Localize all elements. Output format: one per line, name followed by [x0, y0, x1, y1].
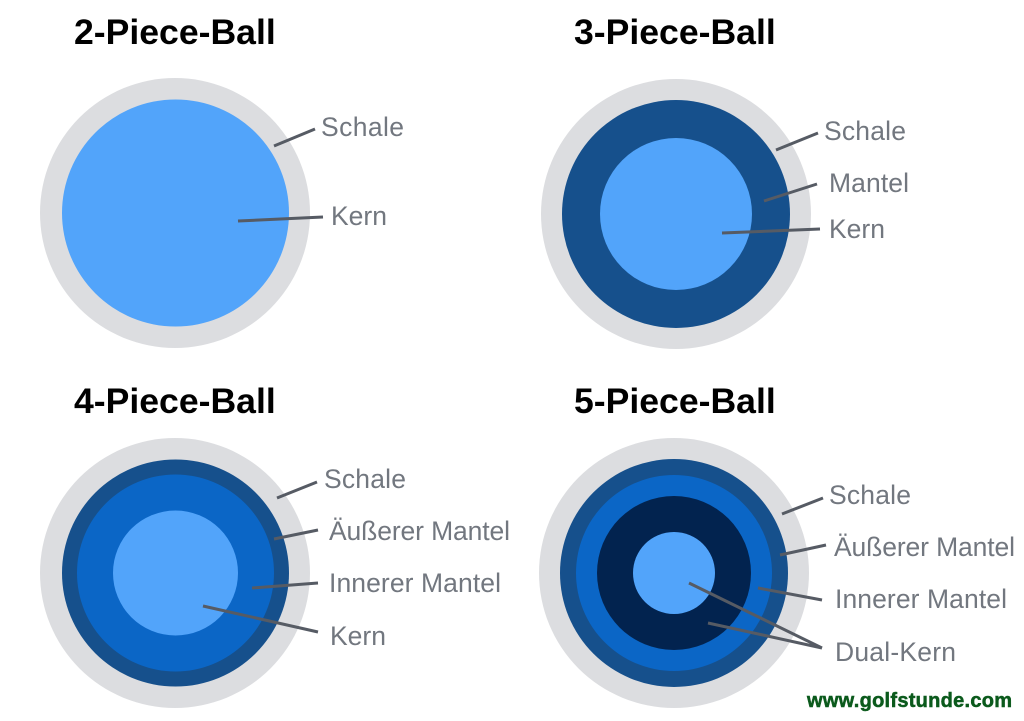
panel: 2-piece ball [40, 12, 404, 348]
website watermark: www.golfstunde.com [806, 690, 1012, 712]
callout: Schale [277, 464, 406, 498]
callout: Äußerer Mantel: Äußerer Mantel [834, 532, 1015, 562]
callout: Mantel [764, 168, 909, 201]
heading: 3-Piece-Ball: 3-Piece-Ball [574, 12, 776, 52]
panel: 3-piece ball [541, 12, 909, 349]
callout: Schale [782, 480, 911, 514]
callout: Kern [722, 214, 885, 244]
diagram: 5-piece ball cross-section [539, 438, 809, 708]
diagram: 3-piece ball cross-section [541, 79, 811, 349]
callout: Äußerer Mantel: Äußerer Mantel [329, 516, 510, 546]
callout: Schale: Schale [324, 464, 406, 494]
callout: Schale: Schale [321, 112, 404, 142]
callout: Kern [238, 201, 387, 231]
heading: 5-Piece-Ball: 5-Piece-Ball [574, 381, 776, 421]
callout: Innerer Mantel: Innerer Mantel [329, 568, 501, 598]
diagram: 4-piece ball cross-section [40, 438, 310, 708]
diagram: 2-piece ball cross-section [40, 78, 310, 348]
callout: Innerer Mantel [252, 568, 501, 598]
callout: Kern: Kern [330, 621, 386, 651]
heading: 4-Piece-Ball: 4-Piece-Ball [74, 381, 276, 421]
callout: Schale: Schale [829, 480, 911, 510]
callout: Schale [274, 112, 404, 146]
callout: Schale: Schale [824, 116, 906, 146]
callout: Mantel: Mantel [829, 168, 909, 198]
callout: Innerer Mantel [758, 584, 1007, 614]
callout: Kern [203, 606, 386, 651]
heading: 2-Piece-Ball: 2-Piece-Ball [74, 12, 276, 52]
callout: Kern: Kern [829, 214, 885, 244]
callout: Dual-Kern: Dual-Kern [835, 637, 956, 667]
callout: Schale [776, 116, 906, 150]
callout: Dual-Kern [689, 583, 956, 667]
panel: 5-piece ball [539, 381, 1015, 708]
panel: 4-piece ball [40, 381, 510, 708]
callout: Kern: Kern [331, 201, 387, 231]
callout: Innerer Mantel: Innerer Mantel [835, 584, 1007, 614]
